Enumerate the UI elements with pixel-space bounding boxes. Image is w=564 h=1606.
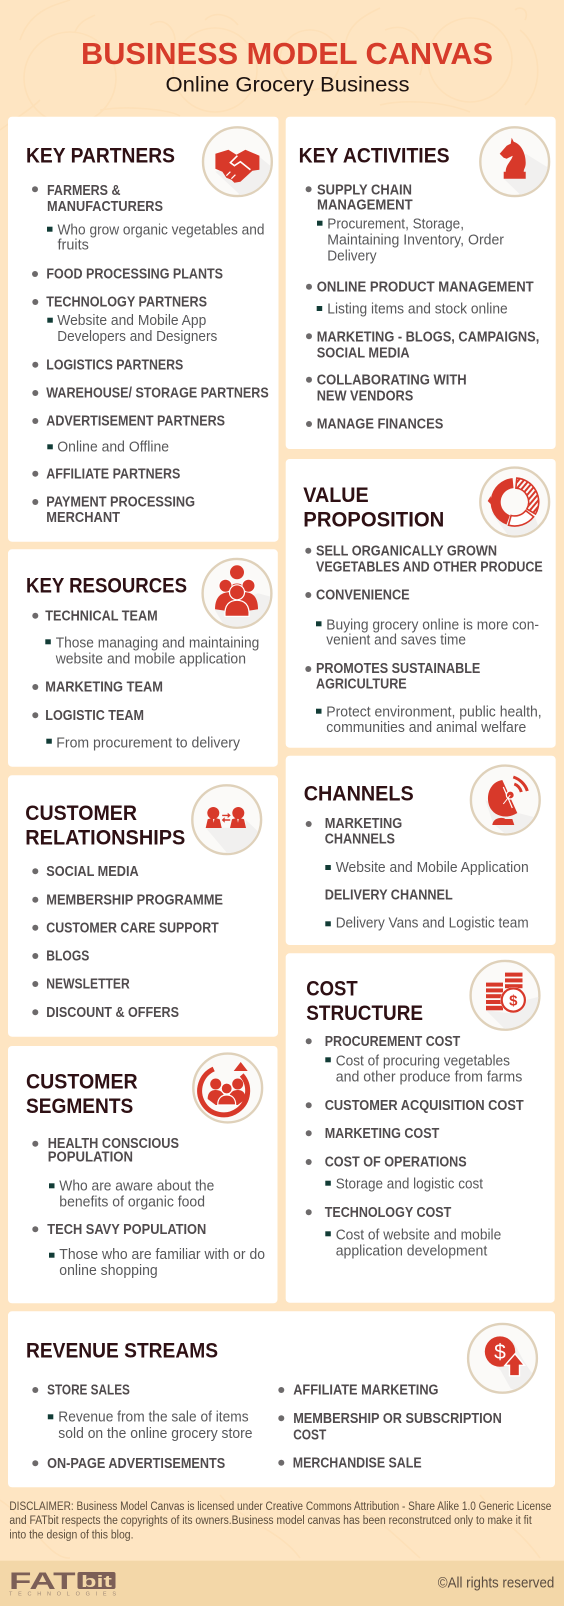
- panel: key activities: [286, 117, 556, 449]
- item: convenience: CONVENIENCE: [316, 588, 410, 604]
- item: health conscious population: HEALTH CONSCIOUS: [48, 1136, 179, 1152]
- item: farmers and manufacturers: [32, 183, 163, 215]
- icon: revenue up: [468, 1324, 542, 1400]
- panel: revenue streams: [8, 1311, 555, 1487]
- logo: FATbit Technologies: bit: [81, 1572, 112, 1591]
- sub-item: cost of website: Cost of website and mobile: [336, 1227, 501, 1243]
- item: farmers and manufacturers: FARMERS &: [47, 183, 121, 199]
- heading: value proposition: VALUE: [303, 484, 369, 507]
- item: marketing: MARKETING - BLOGS, CAMPAIGNS,: [317, 329, 539, 345]
- item: cost of operations: COST OF OPERATIONS: [325, 1155, 467, 1171]
- item: warehouse partners: WAREHOUSE/ STORAGE PARTNERS: [46, 385, 269, 401]
- item: collaborating: NEW VENDORS: [317, 389, 414, 405]
- logo: FATbit Technologies: [9, 1568, 116, 1598]
- sub-item: online and offline: Online and Offline: [57, 440, 169, 456]
- sub-item: buying grocery: Buying grocery online is more con-: [326, 617, 539, 633]
- item: collaborating: [306, 372, 467, 405]
- heading: revenue streams: REVENUE STREAMS: [26, 1340, 218, 1363]
- disclaimer: into the design of this blog.: [9, 1529, 133, 1541]
- item: farmers and manufacturers: MANUFACTURERS: [47, 199, 163, 215]
- logo: FATbit Technologies: FAT: [9, 1568, 76, 1595]
- sub-item: listing items: Listing items and stock online: [327, 301, 508, 317]
- item: customer acquisition cost: CUSTOMER ACQUISITION COST: [325, 1098, 524, 1114]
- heading: customer segments: CUSTOMER: [26, 1071, 138, 1094]
- item: blogs: [32, 949, 90, 965]
- panel: customer relationships: [8, 775, 278, 1037]
- panel: customer segments: [8, 1046, 278, 1303]
- item: membership or subscription: [278, 1411, 502, 1443]
- sub-item: protect environment: Protect environment, public health,: [326, 705, 542, 721]
- sub-item: who are aware: Who are aware about the: [59, 1179, 214, 1195]
- sub-item: who grow organic: fruits: [58, 238, 89, 254]
- item: advertisement partners: ADVERTISEMENT PARTNERS: [46, 414, 225, 430]
- item: supply chain management: SUPPLY CHAIN: [317, 182, 412, 198]
- item: social media: SOCIAL MEDIA: [46, 864, 139, 880]
- logo: FATbit Technologies: TECHNOLOGIES: [9, 1592, 116, 1598]
- item: collaborating: COLLABORATING WITH: [317, 372, 467, 388]
- item: customer care support: CUSTOMER CARE SUPPORT: [46, 920, 219, 936]
- icon: revenue up: $: [494, 1341, 506, 1364]
- item: on-page advertisements: ON-PAGE ADVERTISEMENTS: [47, 1456, 225, 1472]
- item: marketing cost: MARKETING COST: [325, 1126, 439, 1142]
- sub-item: revenue from the sale: Revenue from the sale of items: [58, 1410, 249, 1426]
- sub-item: cost of website: [325, 1227, 501, 1259]
- sub-item: website and mobile app: Developers and Designers: [57, 329, 217, 345]
- item: membership or subscription: MEMBERSHIP OR SUBSCRIPTION: [293, 1411, 502, 1427]
- item: newsletter: NEWSLETTER: [46, 977, 130, 993]
- title: [81, 37, 493, 97]
- item: discount and offers: DISCOUNT & OFFERS: [46, 1005, 179, 1021]
- sub-item: website and mobile application: Website and Mobile Application: [336, 860, 529, 876]
- item: marketing channels: [306, 816, 402, 848]
- item: marketing team: MARKETING TEAM: [45, 680, 163, 696]
- panel: channels: [286, 756, 556, 945]
- heading: cost structure: STRUCTURE: [306, 1002, 423, 1025]
- sub-item: those managing: [45, 635, 259, 667]
- icon: coins: $: [509, 992, 518, 1009]
- heading: key resources: KEY RESOURCES: [26, 574, 187, 597]
- item: promotes sustainable agriculture: [305, 661, 481, 692]
- icon: customer cycle: [193, 1054, 262, 1122]
- item: affiliate marketing: AFFILIATE MARKETING: [293, 1383, 438, 1399]
- sub-item: those familiar: online shopping: [59, 1263, 158, 1279]
- item: promotes sustainable agriculture: AGRICULTURE: [316, 676, 407, 692]
- icon: chess knight: [479, 126, 550, 198]
- item: technology cost: TECHNOLOGY COST: [325, 1205, 451, 1221]
- item: marketing channels: CHANNELS: [325, 832, 395, 848]
- subtitle: Online Grocery Business: [166, 73, 410, 97]
- sub-item: who grow organic: [47, 222, 264, 254]
- heading: customer segments: SEGMENTS: [26, 1095, 133, 1118]
- sub-item: cost of procuring: and other produce from farms: [336, 1069, 522, 1085]
- heading: customer relationships: [25, 802, 185, 849]
- item: marketing: [306, 329, 539, 362]
- item: membership programme: MEMBERSHIP PROGRAMME: [46, 892, 223, 908]
- sub-item: revenue from the sale: [48, 1410, 252, 1442]
- icon: coins: [471, 961, 545, 1037]
- item: marketing: SOCIAL MEDIA: [317, 346, 410, 362]
- item: affiliate partners: AFFILIATE PARTNERS: [46, 466, 181, 482]
- icon: satellite dish: [471, 766, 545, 842]
- heading: cost structure: COST: [306, 978, 358, 1001]
- heading: channels: CHANNELS: [304, 782, 414, 805]
- sub-item: who are aware: [49, 1179, 214, 1211]
- item: payment processing merchant: MERCHANT: [46, 510, 120, 526]
- sub-item: cost of website: application development: [336, 1243, 487, 1259]
- sub-item: those familiar: Those who are familiar with or do: [59, 1247, 265, 1263]
- item: sell organically: [305, 543, 543, 576]
- panel: key partners: [8, 117, 278, 542]
- item: promotes sustainable agriculture: PROMOTES SUSTAINABLE: [316, 661, 481, 677]
- item: logistics partners: LOGISTICS PARTNERS: [46, 357, 184, 373]
- sub-item: revenue from the sale: sold on the online grocery store: [58, 1426, 252, 1442]
- sub-item: cost of procuring: [325, 1053, 522, 1085]
- heading: cost structure: [306, 978, 423, 1025]
- sub-item: buying grocery: venient and saves time: [326, 632, 466, 648]
- panel: value proposition: [286, 459, 556, 748]
- item: procurement cost: PROCUREMENT COST: [325, 1034, 460, 1050]
- main title: BUSINESS MODEL CANVAS: [81, 37, 493, 71]
- heading: value proposition: PROPOSITION: [303, 509, 444, 532]
- icon: handshake: [203, 127, 277, 202]
- item: delivery channel: DELIVERY CHANNEL: [325, 887, 453, 903]
- sub-item: procurement: Delivery: [327, 248, 377, 264]
- item: payment processing merchant: PAYMENT PROCESSING: [46, 495, 195, 511]
- item: online product management: ONLINE PRODUCT MANAGEMENT: [317, 280, 534, 296]
- item: food processing plants: FOOD PROCESSING PLANTS: [46, 266, 223, 282]
- sub-item: procurement: Procurement, Storage,: [327, 217, 464, 233]
- sub-item: website and mobile app: Website and Mobile App: [57, 313, 206, 329]
- panel: key resources: [8, 549, 278, 767]
- heading: key partners: KEY PARTNERS: [26, 145, 175, 168]
- item: manage finances: MANAGE FINANCES: [317, 417, 444, 433]
- sub-item: procurement: [317, 217, 504, 264]
- heading: customer relationships: CUSTOMER: [25, 802, 137, 825]
- item: health conscious population: POPULATION: [48, 1149, 133, 1165]
- sub-item: website and mobile app: [47, 313, 217, 345]
- item: supply chain management: [306, 182, 413, 214]
- heading: key activities: KEY ACTIVITIES: [299, 145, 450, 168]
- item: store sales: STORE SALES: [47, 1383, 130, 1399]
- icon: two people exchanging: [192, 785, 267, 860]
- item: payment processing merchant: [32, 495, 195, 526]
- item: technical team: TECHNICAL TEAM: [45, 608, 158, 624]
- sub-item: protect environment: communities and animal welfare: [326, 720, 526, 736]
- item: merchandise sale: MERCHANDISE SALE: [293, 1455, 422, 1471]
- item: sell organically: SELL ORGANICALLY GROWN: [316, 543, 497, 559]
- sub-item: those managing: website and mobile application: [55, 651, 246, 667]
- item: blogs: BLOGS: [46, 949, 90, 965]
- sub-item: procurement to delivery: From procurement to delivery: [56, 735, 241, 751]
- sub-item: delivery vans: Delivery Vans and Logistic team: [336, 916, 529, 932]
- item: marketing channels: MARKETING: [325, 816, 402, 832]
- heading: value proposition: [303, 484, 444, 532]
- icon: donut chart: [480, 468, 549, 544]
- item: logistic team: LOGISTIC TEAM: [45, 708, 144, 724]
- footer: [0, 1561, 564, 1606]
- sub-item: protect environment: [316, 705, 542, 736]
- sub-item: who are aware: benefits of organic food: [59, 1195, 205, 1211]
- item: membership or subscription: COST: [293, 1427, 326, 1443]
- heading: customer segments: [26, 1071, 138, 1118]
- sub-item: those familiar: [49, 1247, 265, 1279]
- disclaimer: [9, 1501, 551, 1541]
- icon: team: [203, 559, 277, 633]
- sub-item: who grow organic: Who grow organic vegetables and: [58, 222, 264, 238]
- sub-item: buying grocery: [316, 617, 539, 648]
- item: tech savy population: TECH SAVY POPULATION: [47, 1222, 206, 1238]
- sub-item: cost of procuring: Cost of procuring vegetables: [336, 1053, 510, 1069]
- sub-item: procurement: Maintaining Inventory, Order: [327, 232, 504, 248]
- item: supply chain management: MANAGEMENT: [317, 198, 413, 214]
- sub-item: those managing: Those managing and maintaining: [56, 635, 259, 651]
- sub-item: storage and logistic: Storage and logistic cost: [336, 1176, 483, 1192]
- heading: customer relationships: RELATIONSHIPS: [25, 826, 185, 849]
- item: technology partners: TECHNOLOGY PARTNERS: [46, 295, 207, 311]
- item: health conscious population: [32, 1136, 179, 1165]
- panel: cost structure: [286, 953, 555, 1303]
